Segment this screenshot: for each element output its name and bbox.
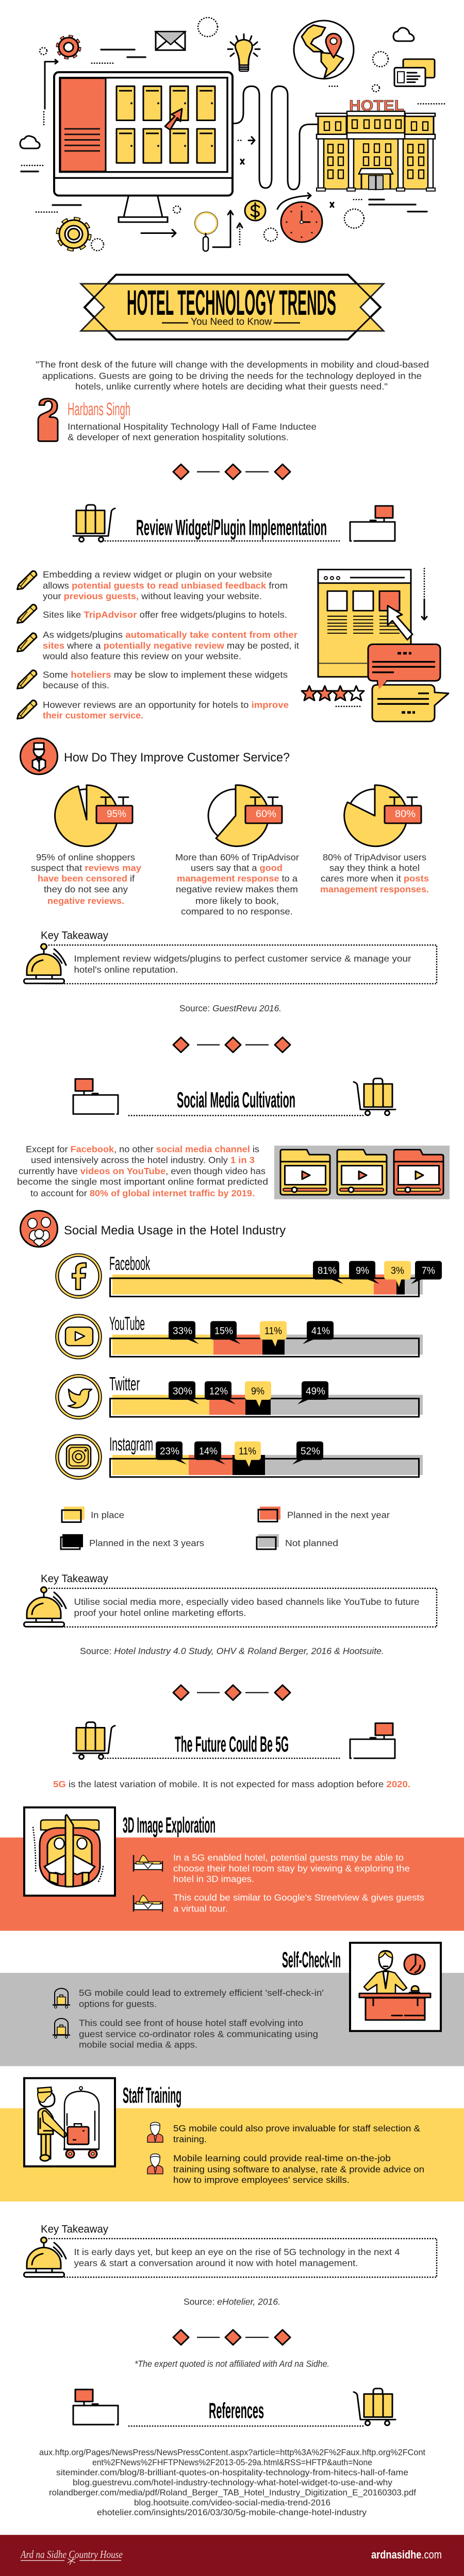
website: ardnasidhe.com xyxy=(371,2548,442,2561)
bullet list: review widgets xyxy=(18,569,299,720)
legend: In place xyxy=(91,1510,124,1520)
divider xyxy=(173,1685,290,1700)
logo: Ard na Sidhe Country House xyxy=(20,2548,123,2565)
icon: light bulb xyxy=(228,34,260,71)
icon: video folder 2 xyxy=(337,1149,387,1195)
illustration: review widget browser xyxy=(302,569,449,721)
icon: pencil xyxy=(18,633,37,652)
text: front of house staff: guest service co-ordinator roles & communicating using xyxy=(79,2029,318,2039)
key takeaway 3: years & start a conversation around it now with hotel management. xyxy=(74,2258,358,2268)
quote attribution: Harbans Singh xyxy=(68,399,130,419)
icon: VR headset xyxy=(33,1815,103,1887)
icon: globe with map pin xyxy=(294,21,354,79)
text: self-check-in options: 5G mobile could lead to extremely efficient 'self-check-in' xyxy=(79,1988,324,1998)
panel: staff training: Staff Training xyxy=(123,2083,181,2108)
pie caption: 95% xyxy=(31,852,141,906)
section heading: the future could be 5G xyxy=(73,1722,395,1759)
panel: self-check-in xyxy=(0,1943,464,2066)
bullet text 1: Embedding a review widget or plugin on your website xyxy=(43,569,272,580)
bar chart: youtube: 11% xyxy=(264,1326,282,1336)
text: staff selection: training. xyxy=(173,2134,207,2144)
divider xyxy=(173,464,290,479)
title banner: You Need to Know xyxy=(191,316,272,328)
icon: clock xyxy=(277,193,322,242)
quote attribution: & developer of next generation hospitality solutions. xyxy=(68,432,289,442)
text: self-check-in options xyxy=(79,1988,324,2009)
text: mobile learning xyxy=(173,2153,424,2185)
pie caption: 95%: negative reviews. xyxy=(47,896,124,906)
text: mobile learning: how to improve employees' service skills. xyxy=(173,2175,350,2185)
bar chart: facebook: 3% xyxy=(391,1265,404,1277)
legend xyxy=(61,1506,390,1549)
bullet text 3: would also feature this review on your website. xyxy=(42,651,241,662)
icon: bellhop in circle xyxy=(21,738,58,774)
key takeaway 1 xyxy=(24,929,437,984)
disclaimer: *The expert quoted is not affiliated with Ard na Sidhe. xyxy=(135,2359,329,2369)
pie caption: 95%: they do not see any xyxy=(44,884,128,894)
legend: Not planned xyxy=(285,1538,338,1548)
pie chart: 60%: 60% xyxy=(256,808,276,820)
key takeaway 1: hotel's online reputation. xyxy=(74,964,178,975)
bar chart: instagram: 23% xyxy=(160,1446,179,1457)
text: front of house staff: mobile social media & apps. xyxy=(79,2040,197,2049)
icon: pencil xyxy=(18,571,37,589)
section heading: social media cultivation: Social Media Cultivation xyxy=(177,1088,295,1113)
icon: receptionist at desk xyxy=(359,1951,430,2020)
key takeaway 2: Utilise social media more, especially video based channels like YouTube to future xyxy=(74,1597,420,1607)
title banner xyxy=(81,275,384,340)
legend: Planned in the next year xyxy=(287,1510,390,1520)
section heading: references xyxy=(73,2388,395,2426)
bar chart: youtube: 33% xyxy=(173,1326,192,1336)
text: 5G hotel room: hotel in 3D images. xyxy=(173,1874,254,1884)
bar chart: twitter: 49% xyxy=(306,1386,325,1397)
key takeaway 3 xyxy=(24,2223,437,2277)
decorative arrows and marks xyxy=(21,18,445,251)
pie chart: 95% xyxy=(55,785,132,846)
icon: twitter xyxy=(56,1375,101,1419)
pie caption: 60%: users say that a good xyxy=(191,863,283,873)
pie caption: 80% xyxy=(320,852,429,894)
section heading: references: References xyxy=(209,2399,264,2423)
icon: video folder 1 xyxy=(280,1149,330,1195)
text: self-check-in options: options for guests. xyxy=(79,1999,157,2009)
bar chart: facebook: 9% xyxy=(356,1265,369,1277)
intro: 5G: 5G is the latest variation of mobile. It is not expected for mass adoption before 2020. xyxy=(53,1779,410,1789)
bar chart: instagram: 52% xyxy=(301,1446,320,1457)
icon: magnifying glass xyxy=(195,212,218,251)
text: front of house staff xyxy=(79,2018,318,2049)
bullet text 5: their customer service. xyxy=(43,710,143,720)
panel: 3D image exploration: 3D Image Exploration xyxy=(123,1813,216,1838)
logo: Ard na Sidhe Country House: Ard na Sidhe Country House xyxy=(20,2548,123,2561)
bar chart: twitter: Twitter xyxy=(109,1373,140,1394)
icon: staff member xyxy=(147,2154,163,2174)
source: Source: Hotel Industry 4.0 Study, OHV & Roland Berger, 2016 & Hootsuite. xyxy=(80,1646,384,1656)
icon: youtube xyxy=(56,1315,101,1359)
bar chart: twitter: 12% xyxy=(209,1386,228,1397)
icon: red gear xyxy=(58,37,79,58)
bar chart: instagram: Instagram xyxy=(109,1433,153,1454)
pie caption: 80%: 80% of TripAdvisor users xyxy=(323,852,426,862)
icon: service bell xyxy=(24,2238,66,2277)
icon: service bell xyxy=(24,944,66,984)
paragraph: social media xyxy=(17,1144,268,1198)
pie chart: 60% xyxy=(208,785,282,846)
references list: aux.hftp.org/Pages/NewsPress/NewsPressContent.aspx?article=http%3A%2F%2Faux.hftp.org%2FCont xyxy=(39,2448,425,2457)
text: front of house staff: This could see front of house hotel staff evolving into xyxy=(79,2018,303,2028)
pie caption: 95%: have been censored if xyxy=(38,873,135,884)
bar chart: youtube: 41% xyxy=(311,1326,330,1336)
bar chart: facebook xyxy=(56,1252,442,1298)
paragraph: social media: to account for 80% of global internet traffic by 2019. xyxy=(30,1188,255,1198)
bar chart: facebook: 81% xyxy=(318,1265,337,1277)
icon: two ID cards xyxy=(394,59,435,86)
references list: ent%2FNews%2FHFTPNews%2F2013-05-29a.html&RSS=HFTP&auth=None xyxy=(92,2458,372,2467)
pie chart: 95%: 95% xyxy=(107,808,126,820)
icon: luggage cart xyxy=(53,2019,70,2038)
text: virtual tour: a virtual tour. xyxy=(173,1904,228,1914)
paragraph: social media: Except for Facebook, no other social media channel is xyxy=(26,1144,259,1154)
section heading: social media cultivation xyxy=(73,1078,395,1115)
quote attribution: International Hospitality Technology Hall of Fame Inductee xyxy=(68,421,317,432)
bullet text 2: Sites like TripAdvisor offer free widgets/plugins to hotels. xyxy=(43,609,287,620)
quote xyxy=(36,360,429,392)
heading: social media usage: Social Media Usage in the Hotel Industry xyxy=(64,1224,286,1238)
icon: cloud left xyxy=(20,136,40,148)
icon: pencil xyxy=(18,700,37,719)
pie caption: 60%: management response to a xyxy=(177,873,297,884)
section heading: review widget xyxy=(73,505,395,541)
text: staff selection: 5G mobile could also prove invaluable for staff selection & xyxy=(173,2123,420,2133)
divider xyxy=(173,2330,290,2345)
icon: video folder 3 xyxy=(394,1149,443,1195)
bullet text 5: However reviews are an opportunity for hotels to improve xyxy=(43,700,289,710)
bullet text 1 xyxy=(43,569,288,601)
pie caption: 60%: more likely to book, xyxy=(195,896,279,906)
bar chart: twitter xyxy=(56,1373,423,1419)
quote: "The front desk of the future will change with the developments in mobility and cloud-based xyxy=(36,360,429,369)
icon: envelope xyxy=(156,31,185,50)
paragraph: social media: used intensively across the hotel industry. Only 1 in 3 xyxy=(31,1155,255,1165)
key takeaway 2: Key Takeaway xyxy=(41,1572,108,1585)
icon: door hanger xyxy=(38,399,58,441)
section heading: the future could be 5G: The Future Could Be 5G xyxy=(175,1733,289,1757)
panel: self-check-in: Self-Check-In xyxy=(282,1948,341,1972)
icon: luggage cart xyxy=(53,1988,70,2008)
pie caption: 80%: say they think a hotel xyxy=(329,863,420,873)
pie chart: 80% xyxy=(344,785,421,846)
pie caption: 95%: 95% of online shoppers xyxy=(36,852,135,862)
text: 5G hotel room: choose their hotel room stay by viewing & exploring the xyxy=(173,1863,410,1874)
text: virtual tour xyxy=(173,1892,424,1914)
pie chart: 80%: 80% xyxy=(395,808,416,820)
bar chart: youtube: YouTube xyxy=(109,1313,145,1334)
bullet text 5 xyxy=(43,700,289,720)
pie caption: 80%: management responses. xyxy=(320,884,429,894)
legend: Planned in the next 3 years xyxy=(89,1538,204,1548)
icon: hotel building: HOTEL xyxy=(349,97,404,114)
key takeaway 3: Key Takeaway xyxy=(41,2223,108,2235)
icon: hotel building xyxy=(316,97,435,191)
bar chart: instagram: 11% xyxy=(239,1446,256,1457)
bar chart: twitter: 9% xyxy=(251,1386,264,1397)
references list: siteminder.com/blog/8-brilliant-quotes-on-hospitality-technology-from-hitecs-hall-of-fame xyxy=(56,2468,408,2477)
pie caption: 80%: cares more when it posts xyxy=(321,873,429,884)
bar chart: facebook: 7% xyxy=(422,1265,435,1277)
bullet text 4 xyxy=(43,670,288,690)
source: Source: eHotelier, 2016. xyxy=(184,2297,280,2307)
pie caption: 60%: negative review makes them xyxy=(176,884,298,894)
icon: bed xyxy=(134,1855,162,1872)
quote: applications. Guests are going to be driving the needs for the technology deployed in the xyxy=(42,371,422,381)
icon: bellhop with luggage cart xyxy=(38,2087,99,2161)
key takeaway 1: Key Takeaway xyxy=(41,929,108,942)
icon: instagram xyxy=(56,1435,101,1479)
bar chart: instagram: 14% xyxy=(199,1446,218,1457)
bar chart: youtube: 15% xyxy=(214,1326,233,1336)
source: Source: GuestRevu 2016. xyxy=(179,1003,281,1013)
bullet text 1: your previous guests, without leaving your website. xyxy=(43,591,262,601)
references list: ehotelier.com/insights/2016/03/30/5g-mobile-change-hotel-industry xyxy=(97,2507,367,2517)
bar chart: instagram xyxy=(56,1433,423,1479)
heading: how do they improve customer service: How Do They Improve Customer Service? xyxy=(64,751,290,765)
illustration: video folders xyxy=(274,1146,450,1199)
footer xyxy=(0,2535,464,2576)
references list: blog.guestrevu.com/hotel-industry-technology-what-hotel-widget-to-use-and-why xyxy=(73,2478,393,2487)
icon: service bell xyxy=(24,1587,66,1626)
icon: bed xyxy=(134,1895,162,1912)
bullet text 4: Some hoteliers may be slow to implement these widgets xyxy=(43,670,288,680)
icon: pencil xyxy=(18,670,37,689)
bullet text 3: sites where a potentially negative review may be posted, it xyxy=(43,640,299,651)
references list: blog.hootsuite.com/video-social-media-trend-2016 xyxy=(134,2498,330,2507)
icon: yellow gear xyxy=(58,219,89,249)
quote attribution xyxy=(68,399,317,442)
icon: computer monitor with hotel room doors xyxy=(54,72,233,222)
quote: hotels, unlike currently where hotels are deciding what their guests need." xyxy=(75,381,388,392)
pie caption: 60%: More than 60% of TripAdvisor xyxy=(175,852,299,862)
references list: rolandberger.com/media/pdf/Roland_Berger_TAB_Hotel_Industry_Digitization_E_20160303.pdf xyxy=(49,2488,416,2497)
route line to hotel xyxy=(233,86,318,190)
divider xyxy=(173,1037,290,1053)
panel: 3D image exploration xyxy=(0,1807,464,1931)
icon: coin xyxy=(245,200,266,221)
icon: pencil xyxy=(18,605,37,623)
bar chart: youtube xyxy=(56,1313,423,1359)
bar chart: twitter: 30% xyxy=(173,1386,192,1397)
references list xyxy=(39,2448,425,2517)
text: staff selection xyxy=(173,2123,420,2144)
paragraph: social media: currently have videos on YouTube, even though video has xyxy=(19,1166,266,1176)
bullet text 3: As widgets/plugins automatically take content from other xyxy=(43,630,297,640)
hero illustration: hotel technology xyxy=(20,18,445,251)
key takeaway 1: Implement review widgets/plugins to perfect customer service & manage your xyxy=(74,954,411,963)
pie caption: 60%: compared to no response. xyxy=(181,906,293,917)
key takeaway 2: proof your hotel online marketing efforts. xyxy=(74,1608,246,1618)
pie caption: 95%: suspect that reviews may xyxy=(31,863,141,873)
text: virtual tour: This could be similar to Google's Streetview & gives guests xyxy=(173,1892,424,1903)
panel: staff training xyxy=(0,2078,464,2201)
bullet text 4: because of this. xyxy=(43,680,109,690)
key takeaway 3: It is early days yet, but keep an eye on the rise of 5G technology in the next 4 xyxy=(74,2247,400,2257)
bullet text 1: allows potential guests to read unbiased feedback from xyxy=(43,581,288,590)
text: 5G hotel room: In a 5G enabled hotel, potential guests may be able to xyxy=(173,1853,404,1862)
pie caption: 60% xyxy=(175,852,299,917)
icon: facebook xyxy=(56,1254,101,1298)
bullet text 3 xyxy=(42,630,299,662)
text: mobile learning: training using software to analyse, rate & provide advice on xyxy=(173,2164,424,2175)
text: 5G hotel room xyxy=(173,1853,410,1884)
text: mobile learning: Mobile learning could provide real-time on-the-job xyxy=(173,2153,391,2163)
bar chart: facebook: Facebook xyxy=(109,1252,150,1274)
icon: people in circle xyxy=(21,1211,58,1247)
icon: staff member xyxy=(147,2122,163,2142)
paragraph: social media: become the single most important online format predicted xyxy=(17,1177,268,1187)
icon: cloud right xyxy=(393,28,414,41)
key takeaway 2 xyxy=(24,1572,437,1627)
